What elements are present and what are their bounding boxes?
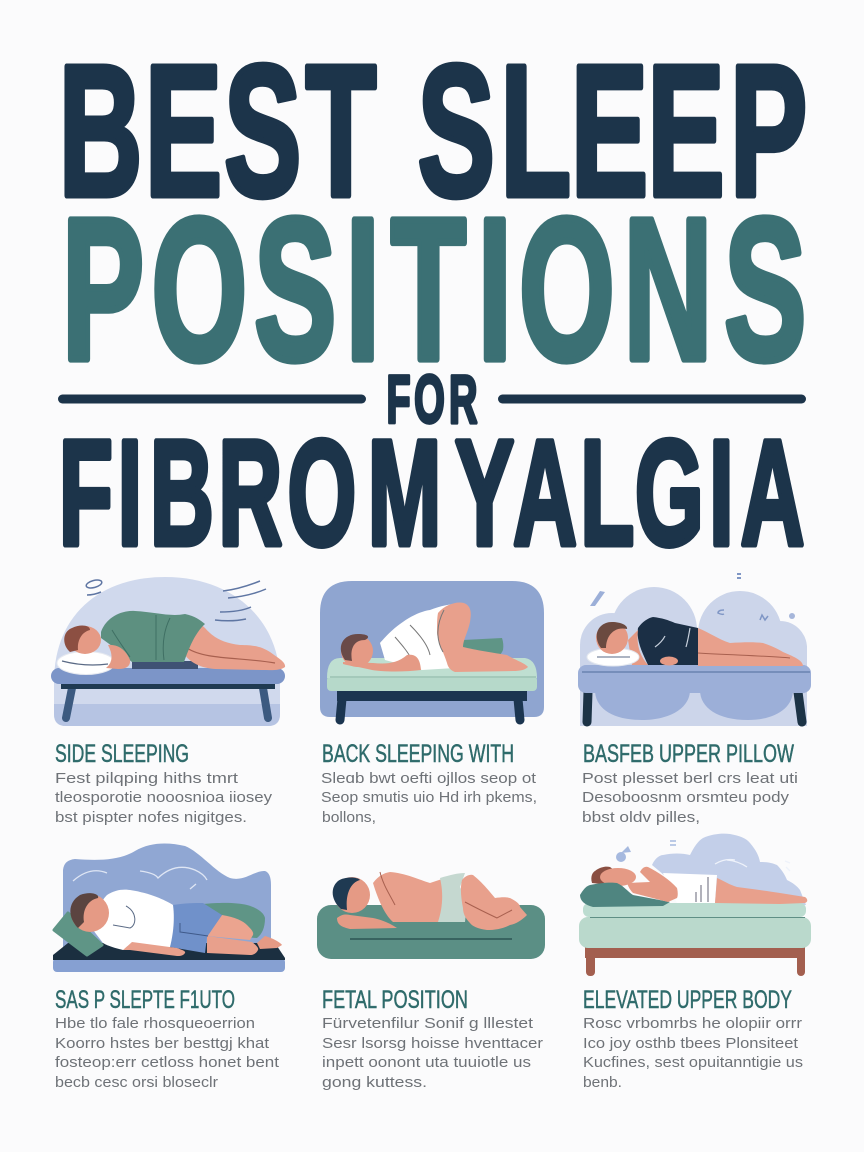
panel: sas p slepte f1uto: [53, 843, 285, 1091]
illustration: upper pillow: [578, 574, 811, 726]
description: side sleeping: tleosporotie nooosnioa iiosey: [55, 790, 273, 806]
description: fetal position: inpett oonont uta tuuiotle us: [322, 1055, 531, 1071]
panel: back sleeping with: [320, 581, 544, 826]
title line: for: FOR: [386, 361, 478, 437]
description: elevated upper body: Kucfines, sest opuitanntigie us: [583, 1055, 803, 1071]
description: back sleeping with: Sleɑb bwt oefti ojllos seop ot: [321, 771, 536, 787]
panel: fetal position: [317, 872, 545, 1091]
panel: basfeb upper pillow: [578, 574, 811, 826]
description: elevated upper body: [583, 1016, 803, 1091]
description: side sleeping: [55, 771, 273, 826]
heading: side sleeping: SIDE SLEEPING: [55, 740, 189, 768]
heading: sas p slepte f1uto: SAS P SLEPTE F1UTO: [55, 986, 235, 1014]
description: basfeb upper pillow: Post plesset berl crs leat uti: [582, 771, 798, 787]
description: back sleeping with: bollons,: [322, 810, 376, 826]
description: sas p slepte f1uto: becb cesc orsi bloseclr: [55, 1075, 218, 1091]
description: fetal position: Sesr lsorsg hoisse hventtacer: [322, 1036, 543, 1052]
description: side sleeping: bst pispter nofes nigitges.: [55, 810, 247, 826]
description: basfeb upper pillow: [582, 771, 798, 826]
description: elevated upper body: benb.: [583, 1075, 622, 1091]
title: [59, 27, 807, 577]
title line: fibromyalgia: FIBROMYALGIA: [59, 411, 804, 577]
illustration: fetal position: [317, 872, 545, 959]
heading: back sleeping with: BACK SLEEPING WITH: [322, 740, 514, 768]
description: sas p slepte f1uto: fosteop:err cetloss honet bent: [55, 1055, 279, 1071]
panel: side sleeping: [51, 577, 285, 826]
description: basfeb upper pillow: bbst oldv pilles,: [582, 810, 700, 826]
description: side sleeping: Fest pilqping hiths tmrt: [55, 771, 238, 787]
description: back sleeping with: Seop smutis uio Hd irh pkems,: [321, 790, 537, 806]
illustration: side sleeping: [51, 577, 285, 726]
description: back sleeping with: [321, 771, 537, 826]
description: fetal position: [322, 1016, 543, 1091]
description: sas p slepte f1uto: Hbe tlo fale rhosqueoerrion: [55, 1016, 255, 1032]
description: fetal position: Fürvetenfilur Sonif g lllestet: [322, 1016, 533, 1032]
illustration: back sleeping with: [320, 581, 544, 720]
description: sas p slepte f1uto: [55, 1016, 279, 1091]
description: elevated upper body: Rosc vrbomrbs he olopiir orrr: [583, 1016, 802, 1032]
description: sas p slepte f1uto: Koorro hstes ber besttgj khat: [55, 1036, 269, 1052]
title line: best sleep: BEST SLEEP: [59, 27, 807, 236]
title line: positions: POSITIONS: [62, 178, 806, 402]
description: fetal position: gong kuttess.: [322, 1075, 427, 1091]
description: basfeb upper pillow: Desoboosnm orsmteu pody: [582, 790, 790, 806]
panel: elevated upper body: [579, 834, 811, 1091]
description: elevated upper body: Ico joy osthb tbees Plonsiteet: [583, 1036, 798, 1052]
illustration: sas p slepte: [53, 843, 285, 972]
illustration: elevated upper body: [579, 834, 811, 976]
heading: fetal position: FETAL POSITION: [322, 986, 468, 1014]
